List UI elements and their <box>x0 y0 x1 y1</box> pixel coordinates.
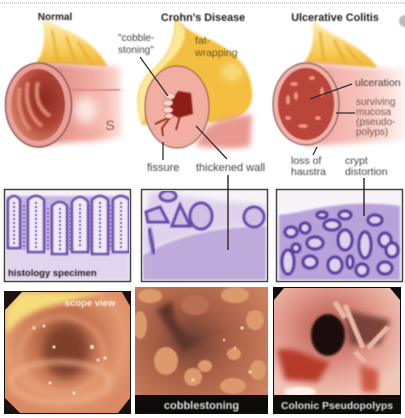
panel: ulcerative colitis illustration <box>273 18 405 178</box>
panel: scope view photo <box>4 291 131 414</box>
dark central fold <box>154 298 200 352</box>
label: cobblestoning: stoning" <box>118 45 154 56</box>
panel: Crohn's disease illustration <box>118 17 265 174</box>
pointer lines into histology panels <box>228 175 364 250</box>
thickened tube <box>195 114 252 148</box>
gray blob at right edge <box>399 15 405 27</box>
distorted crypts <box>282 211 398 276</box>
label: fat-wrapping: fat- <box>195 35 211 47</box>
S-shaped ligature mark: S <box>105 117 115 133</box>
panel: normal colon illustration <box>6 18 122 147</box>
fat tissue <box>304 18 378 68</box>
label: crypt distortion: distortion <box>345 166 388 178</box>
heading: Ulcerative Colitis: Ulcerative Colitis <box>291 12 379 24</box>
fat tissue <box>36 18 108 67</box>
label: fissure: fissure <box>147 162 179 174</box>
panel: normal histology <box>4 190 130 282</box>
dark lumen <box>311 314 345 356</box>
label: loss of haustra: haustra <box>291 166 326 178</box>
label: surviving mucosa: polyps) <box>356 127 388 138</box>
label: scope view: scope view <box>65 298 116 309</box>
yellow glare <box>4 292 105 335</box>
label: ulceration: ulceration <box>355 77 401 89</box>
red inflamed mucosa <box>277 349 330 382</box>
label: loss of haustra: loss of <box>291 155 321 167</box>
label: thickened wall: thickened wall <box>196 162 265 174</box>
elongated crypts <box>8 196 129 254</box>
panel: ulcerative colitis histology <box>276 190 402 282</box>
cobblestone nodules <box>133 287 266 394</box>
fat wrapping <box>138 17 252 125</box>
colon opening <box>6 63 72 147</box>
pseudopolyp strands <box>335 302 388 362</box>
label: cobblestoning: "cobble- <box>118 33 154 44</box>
label: surviving mucosa: (pseudo- <box>356 117 395 128</box>
label: surviving mucosa: surviving <box>356 97 395 108</box>
panel: cobblestoning photo <box>133 287 268 414</box>
mucosal highlights <box>32 324 106 394</box>
caption bar: cobblestoning: cobblestoning <box>164 400 239 412</box>
heading: Normal: Normal <box>38 12 72 23</box>
pointer lines <box>310 84 355 155</box>
label: surviving mucosa: mucosa <box>356 107 391 118</box>
panel: colonic pseudopolyps photo <box>273 287 401 414</box>
label: crypt distortion: crypt <box>345 155 368 167</box>
nodule highlights <box>192 326 252 382</box>
colon tube <box>306 63 405 146</box>
label: fat-wrapping: wrapping <box>194 47 238 59</box>
pointer lines <box>140 57 227 160</box>
thickened wall opening <box>145 66 209 148</box>
top dotted border <box>0 2 405 4</box>
heading: Crohn's Disease: Crohn's Disease <box>161 12 245 24</box>
ulcerated opening <box>273 63 339 145</box>
label: histology specimen: histology specimen <box>8 268 97 279</box>
crypt lining <box>14 202 121 250</box>
panel: Crohn's histology <box>142 190 268 282</box>
lumen and fissures <box>168 91 193 118</box>
colon tube <box>38 64 122 146</box>
cobblestones <box>163 93 175 118</box>
lumen shadow <box>44 326 88 378</box>
caption bar: Colonic Pseudopolyps: Colonic Pseudopolyps <box>281 401 393 412</box>
